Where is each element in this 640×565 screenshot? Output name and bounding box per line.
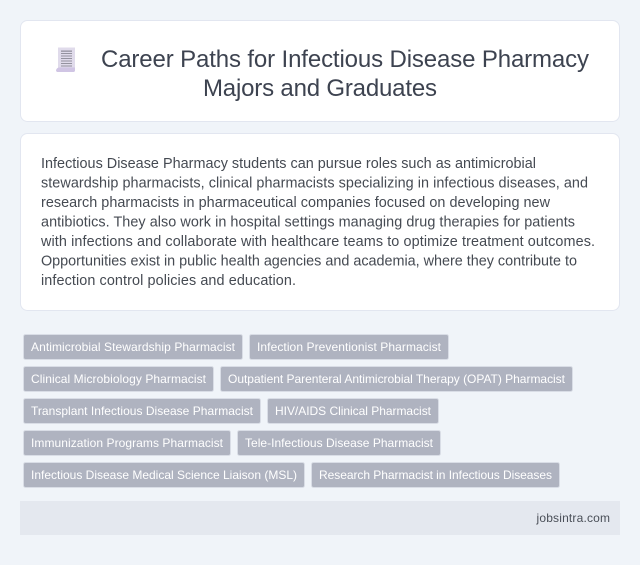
description text: with infections and collaborate with healthcare teams to optimize treatment outcomes. (40, 234, 595, 250)
icon: document scroll (56, 48, 75, 72)
tag: Infectious Disease MSL: Infectious Disease Medical Science Liaison (MSL) (31, 468, 297, 482)
tag: Clinical Microbiology Pharmacist (24, 366, 214, 392)
tag: Infection Preventionist Pharmacist (250, 334, 448, 360)
title: Career Paths for Infectious Disease Pharmacy (101, 46, 589, 73)
title: Majors and Graduates (203, 75, 437, 102)
description text: stewardship pharmacists, clinical pharmacists specializing in infectious diseases, and (41, 176, 588, 192)
tag: Tele-Infectious Disease Pharmacist (238, 430, 440, 456)
tag: Clinical Microbiology Pharmacist: Clinical Microbiology Pharmacist (31, 372, 207, 386)
tag: Antimicrobial Stewardship Pharmacist (24, 334, 242, 360)
description text: Opportunities exist in public health agencies and academia, where they contribute to (41, 254, 577, 270)
tag: OPAT Pharmacist: Outpatient Parenteral Antimicrobial Therapy (OPAT) Pharmacist (228, 372, 566, 386)
career tags (24, 334, 572, 488)
tag: Immunization Programs Pharmacist (24, 430, 230, 456)
description text: antibiotics. They also work in hospital settings managing drug therapies for patients (41, 214, 575, 230)
tag: Research Pharmacist in Infectious Diseases (312, 462, 560, 488)
tag: Antimicrobial Stewardship Pharmacist: Antimicrobial Stewardship Pharmacist (31, 340, 236, 354)
tag: Transplant Infectious Disease Pharmacist (24, 398, 260, 424)
tag: Infection Preventionist Pharmacist: Infection Preventionist Pharmacist (257, 340, 442, 354)
title (101, 46, 589, 102)
tag: Research Pharmacist in Infectious Diseases: Research Pharmacist in Infectious Diseases (319, 468, 552, 482)
tag: Transplant Infectious Disease Pharmacist: Transplant Infectious Disease Pharmacist (31, 404, 254, 418)
tag: HIV/AIDS Clinical Pharmacist (268, 398, 438, 424)
panel: description (20, 134, 620, 310)
description text: infection control policies and education. (41, 273, 296, 289)
description text: research pharmacists in pharmaceutical companies focused on developing new (41, 195, 551, 211)
description text: Infectious Disease Pharmacy students can pursue roles such as antimicrobial (41, 156, 536, 172)
tag: OPAT Pharmacist (220, 366, 572, 392)
panel: title card (20, 20, 620, 122)
tag: Infectious Disease MSL (24, 462, 304, 488)
description text (40, 156, 595, 289)
tag: HIV/AIDS Clinical Pharmacist: HIV/AIDS Clinical Pharmacist (275, 404, 432, 418)
footer source: jobsintra.com (536, 511, 610, 525)
tag: Immunization Programs Pharmacist: Immunization Programs Pharmacist (31, 436, 224, 450)
tag: Tele-Infectious Disease Pharmacist: Tele-Infectious Disease Pharmacist (245, 436, 434, 450)
footer bar (20, 501, 620, 535)
